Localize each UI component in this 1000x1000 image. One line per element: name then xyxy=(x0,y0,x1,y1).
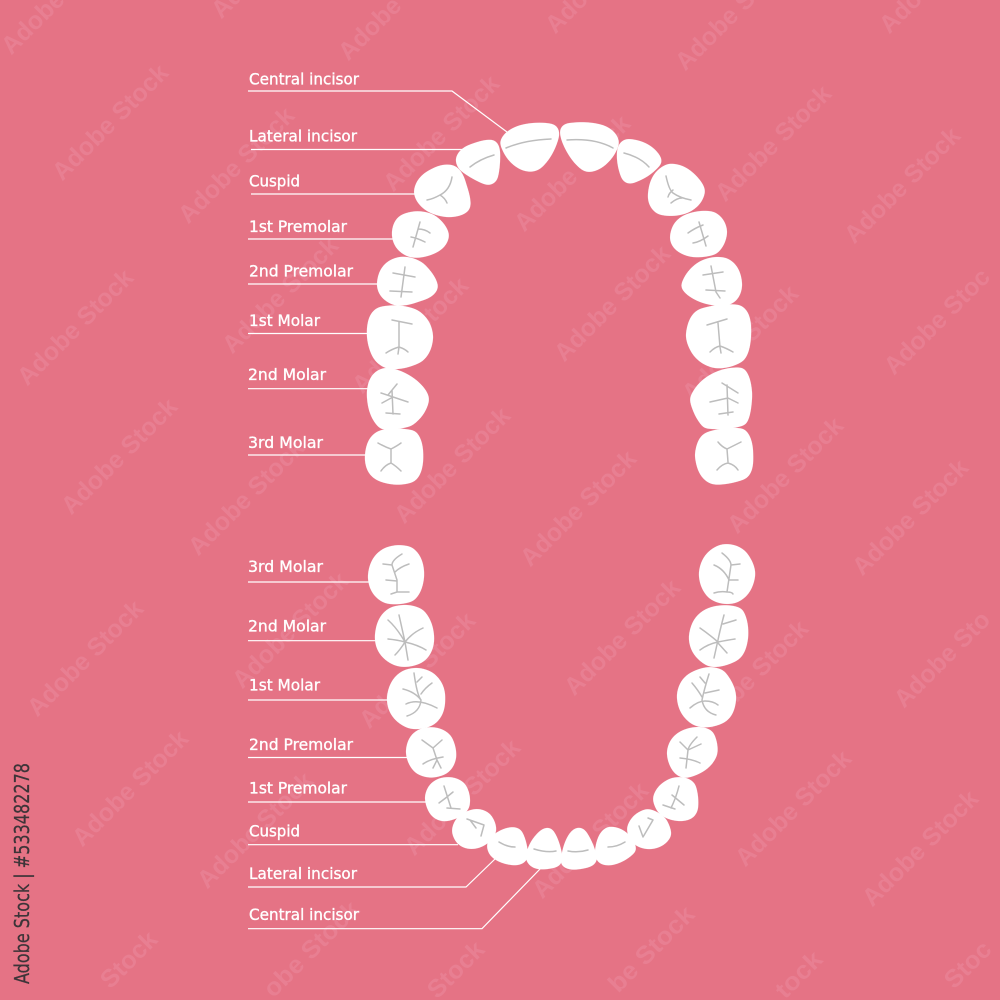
watermark pattern: Adobe Stock xyxy=(527,777,654,904)
tooth: upper right 2nd premolar xyxy=(681,257,742,306)
label: lateral incisor: Lateral incisor xyxy=(249,127,357,146)
watermark pattern: obe Stock xyxy=(258,895,365,1000)
tooth: lower left lateral incisor xyxy=(487,827,528,865)
label: 2nd premolar: 2nd Premolar xyxy=(249,262,353,281)
tooth: upper left lateral incisor xyxy=(456,140,500,185)
watermark pattern: Adobe Stock xyxy=(722,412,849,539)
watermark pattern: Adobe Stock xyxy=(677,280,804,407)
watermark pattern: Adobe Stock xyxy=(354,607,481,734)
tooth: upper left 1st premolar xyxy=(392,211,449,258)
watermark pattern: Adobe Stock xyxy=(347,272,474,399)
lower arch teeth xyxy=(368,544,755,870)
label: 2nd premolar: 2nd Premolar xyxy=(249,735,353,754)
upper arch labels xyxy=(248,70,507,455)
label: 2nd molar: 2nd Molar xyxy=(248,617,326,636)
tooth: lower right lateral incisor xyxy=(595,827,636,865)
tooth: upper left cuspid xyxy=(414,165,470,217)
tooth: lower right central incisor xyxy=(561,828,597,870)
watermark pattern: Adobe Stock xyxy=(509,110,636,237)
watermark pattern: Adobe Stock xyxy=(559,574,686,701)
watermark pattern: Adobe Stock xyxy=(857,785,984,912)
watermark pattern: Adobe Stock xyxy=(192,767,319,894)
tooth: upper right 1st molar xyxy=(686,304,751,368)
tooth: upper left 2nd molar xyxy=(367,368,429,430)
tooth: lower left 3rd molar xyxy=(368,545,424,604)
watermark pattern: Adobe Stock xyxy=(12,264,139,391)
watermark pattern: Adobe Stock xyxy=(687,615,814,742)
tooth: lower right 2nd molar xyxy=(689,605,748,667)
label: central incisor xyxy=(248,868,541,929)
watermark pattern: Adobe Stock xyxy=(173,102,300,229)
tooth: lower left 1st molar xyxy=(387,668,445,729)
tooth: upper left 2nd premolar xyxy=(377,257,438,306)
watermark pattern: Stoc xyxy=(939,935,997,994)
label: 1st molar: 1st Molar xyxy=(249,311,320,330)
watermark pattern: be Stock xyxy=(603,900,700,998)
tooth: upper left 3rd molar xyxy=(365,429,423,484)
tooth: lower left central incisor xyxy=(526,828,562,869)
label: 2nd premolar xyxy=(248,262,379,284)
label: lateral incisor: Lateral incisor xyxy=(249,864,357,883)
label: central incisor: Central incisor xyxy=(249,905,359,924)
tooth: lower right 2nd premolar xyxy=(667,727,718,778)
label: cuspid: Cuspid xyxy=(249,172,300,191)
label: 2nd molar xyxy=(248,617,376,641)
tooth: lower right 1st premolar xyxy=(653,777,698,821)
tooth: upper right cuspid xyxy=(648,164,705,216)
label: 1st premolar: 1st Premolar xyxy=(249,778,347,797)
watermark pattern: Adobe Stock xyxy=(22,595,149,722)
watermark pattern: Adobe Stoc xyxy=(878,263,996,380)
tooth: upper right 2nd molar xyxy=(690,368,752,429)
label: 1st premolar: 1st Premolar xyxy=(249,217,347,236)
watermark pattern: Adobe Stock xyxy=(399,734,526,861)
tooth: lower right cuspid xyxy=(627,809,671,849)
tooth: upper right lateral incisor xyxy=(617,139,662,184)
label: 3rd molar: 3rd Molar xyxy=(248,557,323,576)
watermark pattern: Adobe Stock xyxy=(710,80,837,207)
tooth: upper right 1st premolar xyxy=(670,211,727,257)
tooth: upper right central incisor xyxy=(560,122,619,172)
label: 1st molar xyxy=(248,676,388,700)
label: 3rd molar: 3rd Molar xyxy=(248,433,323,452)
label: central incisor: Central incisor xyxy=(249,70,359,88)
watermark pattern: Adobe Stock xyxy=(730,745,857,872)
tooth: lower left 2nd premolar xyxy=(406,727,456,777)
label: 1st molar xyxy=(248,311,368,334)
watermark pattern: Adobe Stock xyxy=(847,454,974,581)
lower arch labels xyxy=(248,557,541,929)
label: 3rd molar xyxy=(248,557,369,582)
tooth: lower right 3rd molar xyxy=(699,544,755,604)
label: 3rd molar xyxy=(248,433,367,455)
watermark pattern: Stock xyxy=(95,925,163,994)
watermark pattern: Adobe Stock xyxy=(515,445,642,572)
label: 2nd molar xyxy=(248,365,368,389)
upper arch teeth xyxy=(365,122,753,484)
tooth: lower right 1st molar xyxy=(677,667,736,727)
tooth: lower left 1st premolar xyxy=(425,777,470,821)
label: central incisor xyxy=(248,70,507,132)
watermark pattern: Adobe Stock xyxy=(47,59,174,186)
label: lateral incisor xyxy=(248,859,495,887)
watermark pattern: Adobe Stock xyxy=(389,402,516,529)
tooth: upper left central incisor xyxy=(500,123,559,172)
watermark pattern: Adobe Stock xyxy=(378,70,505,197)
watermark pattern: Adobe Stock xyxy=(56,393,183,520)
stock image id text: Adobe Stock | #533482278 xyxy=(10,763,34,984)
tooth: upper right 3rd molar xyxy=(695,428,753,484)
watermark pattern: Adobe Stock xyxy=(839,122,966,249)
watermark pattern: Adobe Sto xyxy=(888,606,996,713)
watermark pattern: Adobe Stock xyxy=(67,725,194,852)
label: 1st molar: 1st Molar xyxy=(249,676,320,695)
watermark pattern: Adobe Stock xyxy=(549,240,676,367)
watermark pattern: Adobe Stock xyxy=(217,232,344,359)
label: 2nd molar: 2nd Molar xyxy=(248,365,326,384)
label: cuspid: Cuspid xyxy=(249,822,300,841)
tooth: upper left 1st molar xyxy=(367,306,433,369)
tooth: lower left 2nd molar xyxy=(375,605,434,667)
tooth: lower left cuspid xyxy=(452,809,496,849)
watermark pattern: Adobe Stock xyxy=(183,434,310,561)
watermark pattern: Adobe Stock xyxy=(227,567,354,694)
